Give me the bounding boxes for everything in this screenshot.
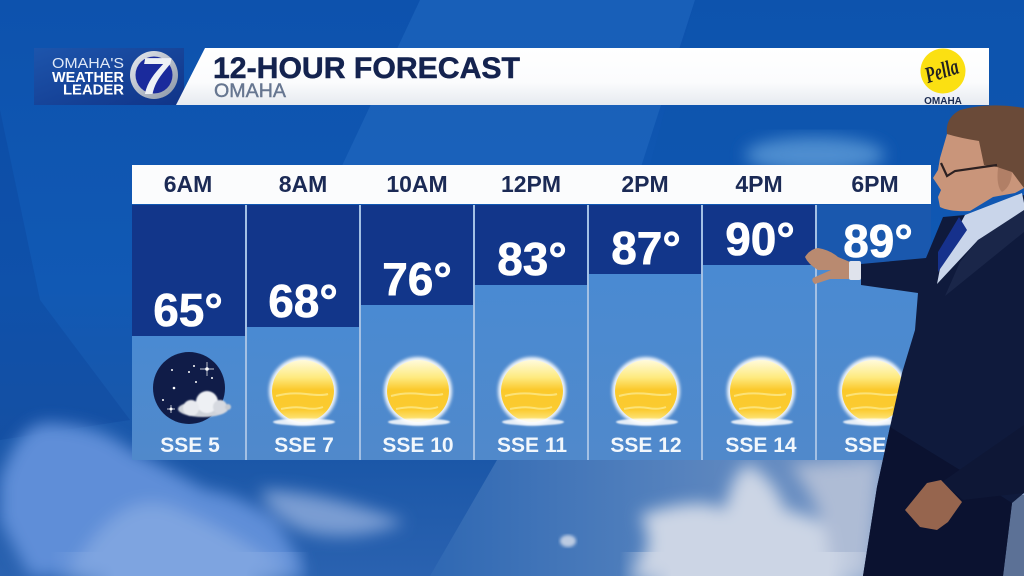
column: 10AM: SSE 10	[382, 434, 454, 457]
header bar	[34, 48, 989, 107]
time header row: 2PM	[621, 171, 669, 197]
title bar	[176, 48, 989, 105]
column: 4PM: 90°	[725, 213, 795, 265]
shirt cuff	[849, 261, 861, 280]
time header row: 10AM	[386, 171, 448, 197]
icon: sun	[498, 357, 566, 426]
column: 4PM	[703, 205, 815, 460]
column: 12PM: 83°	[497, 233, 567, 285]
glasses	[941, 163, 997, 176]
jacket lapel	[945, 210, 1024, 296]
column: 6AM	[132, 205, 245, 460]
time header row: 4PM	[735, 171, 783, 197]
presenter	[805, 105, 1024, 576]
hand at waist	[905, 480, 962, 530]
icon: night sky with cloud	[153, 352, 231, 424]
column: 6PM: 89°	[843, 215, 913, 267]
sponsor logo: Pella	[921, 54, 962, 89]
column: 8AM: SSE 7	[274, 434, 334, 457]
station logo panel: 7	[141, 48, 172, 106]
tie	[938, 217, 967, 272]
shirt collar	[937, 193, 1024, 284]
icon: sun	[269, 357, 337, 426]
column: 12PM: SSE 11	[497, 434, 567, 457]
column: 8AM	[247, 205, 359, 460]
column: 6AM: 65°	[153, 284, 223, 336]
icon: sun	[612, 357, 680, 426]
column: 6AM: SSE 5	[160, 434, 220, 457]
title: 12-HOUR FORECAST	[213, 52, 520, 85]
column: 6PM	[817, 205, 931, 460]
station logo panel: OMAHA'S	[52, 56, 124, 72]
time header row: 12PM	[501, 171, 561, 197]
jacket and trousers	[861, 195, 1024, 576]
column: 10AM	[361, 205, 473, 460]
hair	[947, 105, 1024, 188]
time header row: 8AM	[279, 171, 327, 197]
face	[933, 134, 1024, 211]
forecast table	[132, 165, 931, 460]
icon: sun	[839, 357, 907, 426]
station logo panel: WEATHER	[52, 70, 125, 86]
column: 6PM: SSE 1	[844, 434, 904, 457]
ear	[998, 167, 1012, 192]
station logo panel	[34, 48, 184, 106]
subtitle: OMAHA	[214, 81, 286, 102]
time header row: 6PM	[851, 171, 899, 197]
time header row	[132, 165, 931, 204]
station logo panel: LEADER	[63, 82, 125, 98]
sponsor logo	[920, 48, 966, 107]
column: 10AM: 76°	[382, 253, 452, 305]
column: 2PM	[589, 205, 701, 460]
column: 8AM: 68°	[268, 275, 338, 327]
sponsor logo: OMAHA	[924, 96, 962, 107]
icon: sun	[384, 357, 452, 426]
column: 4PM: SSE 14	[725, 434, 797, 457]
icon: sun	[727, 357, 795, 426]
column: 12PM	[475, 205, 587, 460]
column: 2PM: SSE 12	[610, 434, 682, 457]
time header row: 6AM	[164, 171, 212, 197]
hand pointing	[805, 248, 850, 284]
column: 2PM: 87°	[611, 222, 681, 274]
